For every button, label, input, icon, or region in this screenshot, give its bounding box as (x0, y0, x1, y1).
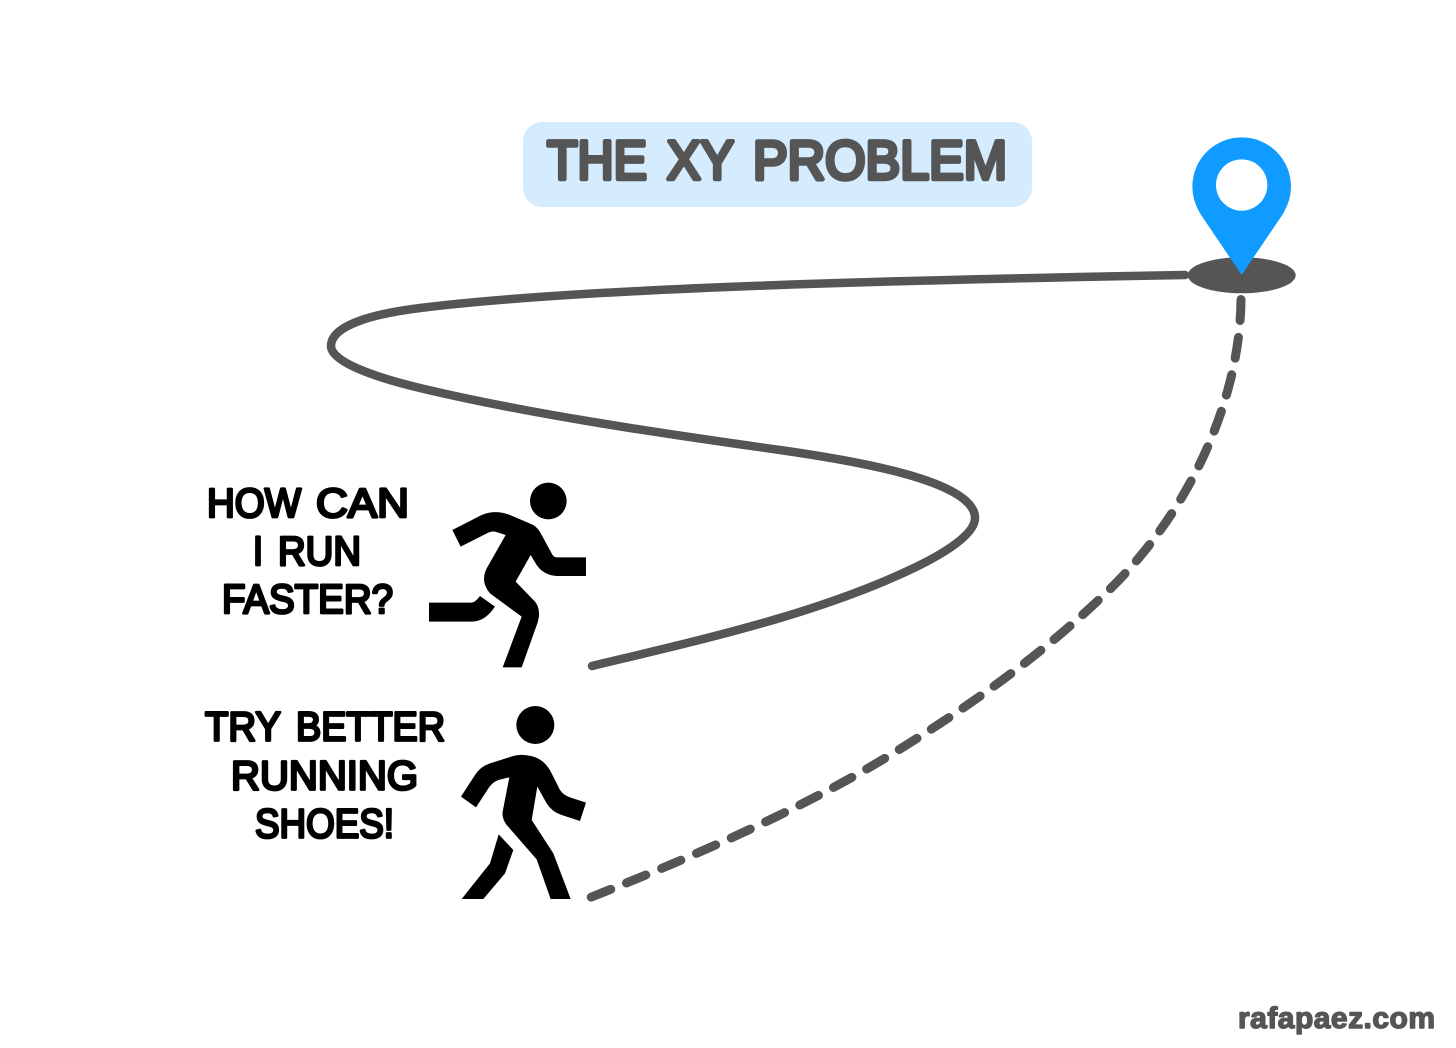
answer text: SHOES! (255, 800, 394, 846)
answer text: BETTER (296, 704, 445, 750)
question text: I (253, 528, 263, 574)
long winding solid path (331, 275, 1185, 666)
title text: THE (547, 129, 647, 191)
title background (523, 122, 1032, 207)
icon: runner (429, 483, 586, 667)
question text: CAN (316, 480, 409, 526)
pin shadow (1188, 257, 1296, 293)
answer text: TRY (205, 704, 281, 750)
question text: RUN (278, 528, 361, 574)
title text: XY (667, 129, 734, 191)
answer text (205, 704, 445, 846)
icon: location pin destination (1188, 137, 1296, 293)
short dashed path (589, 300, 1241, 898)
pin marker (1192, 137, 1291, 275)
question text (207, 480, 409, 622)
title (523, 122, 1032, 207)
answer text: RUNNING (231, 752, 418, 798)
question text: HOW (207, 480, 301, 526)
credit: website: rafapaez.com (1238, 1002, 1435, 1035)
title text (547, 129, 1007, 191)
question text: FASTER? (222, 576, 393, 622)
title text: PROBLEM (753, 129, 1007, 191)
icon: walker (461, 706, 586, 899)
